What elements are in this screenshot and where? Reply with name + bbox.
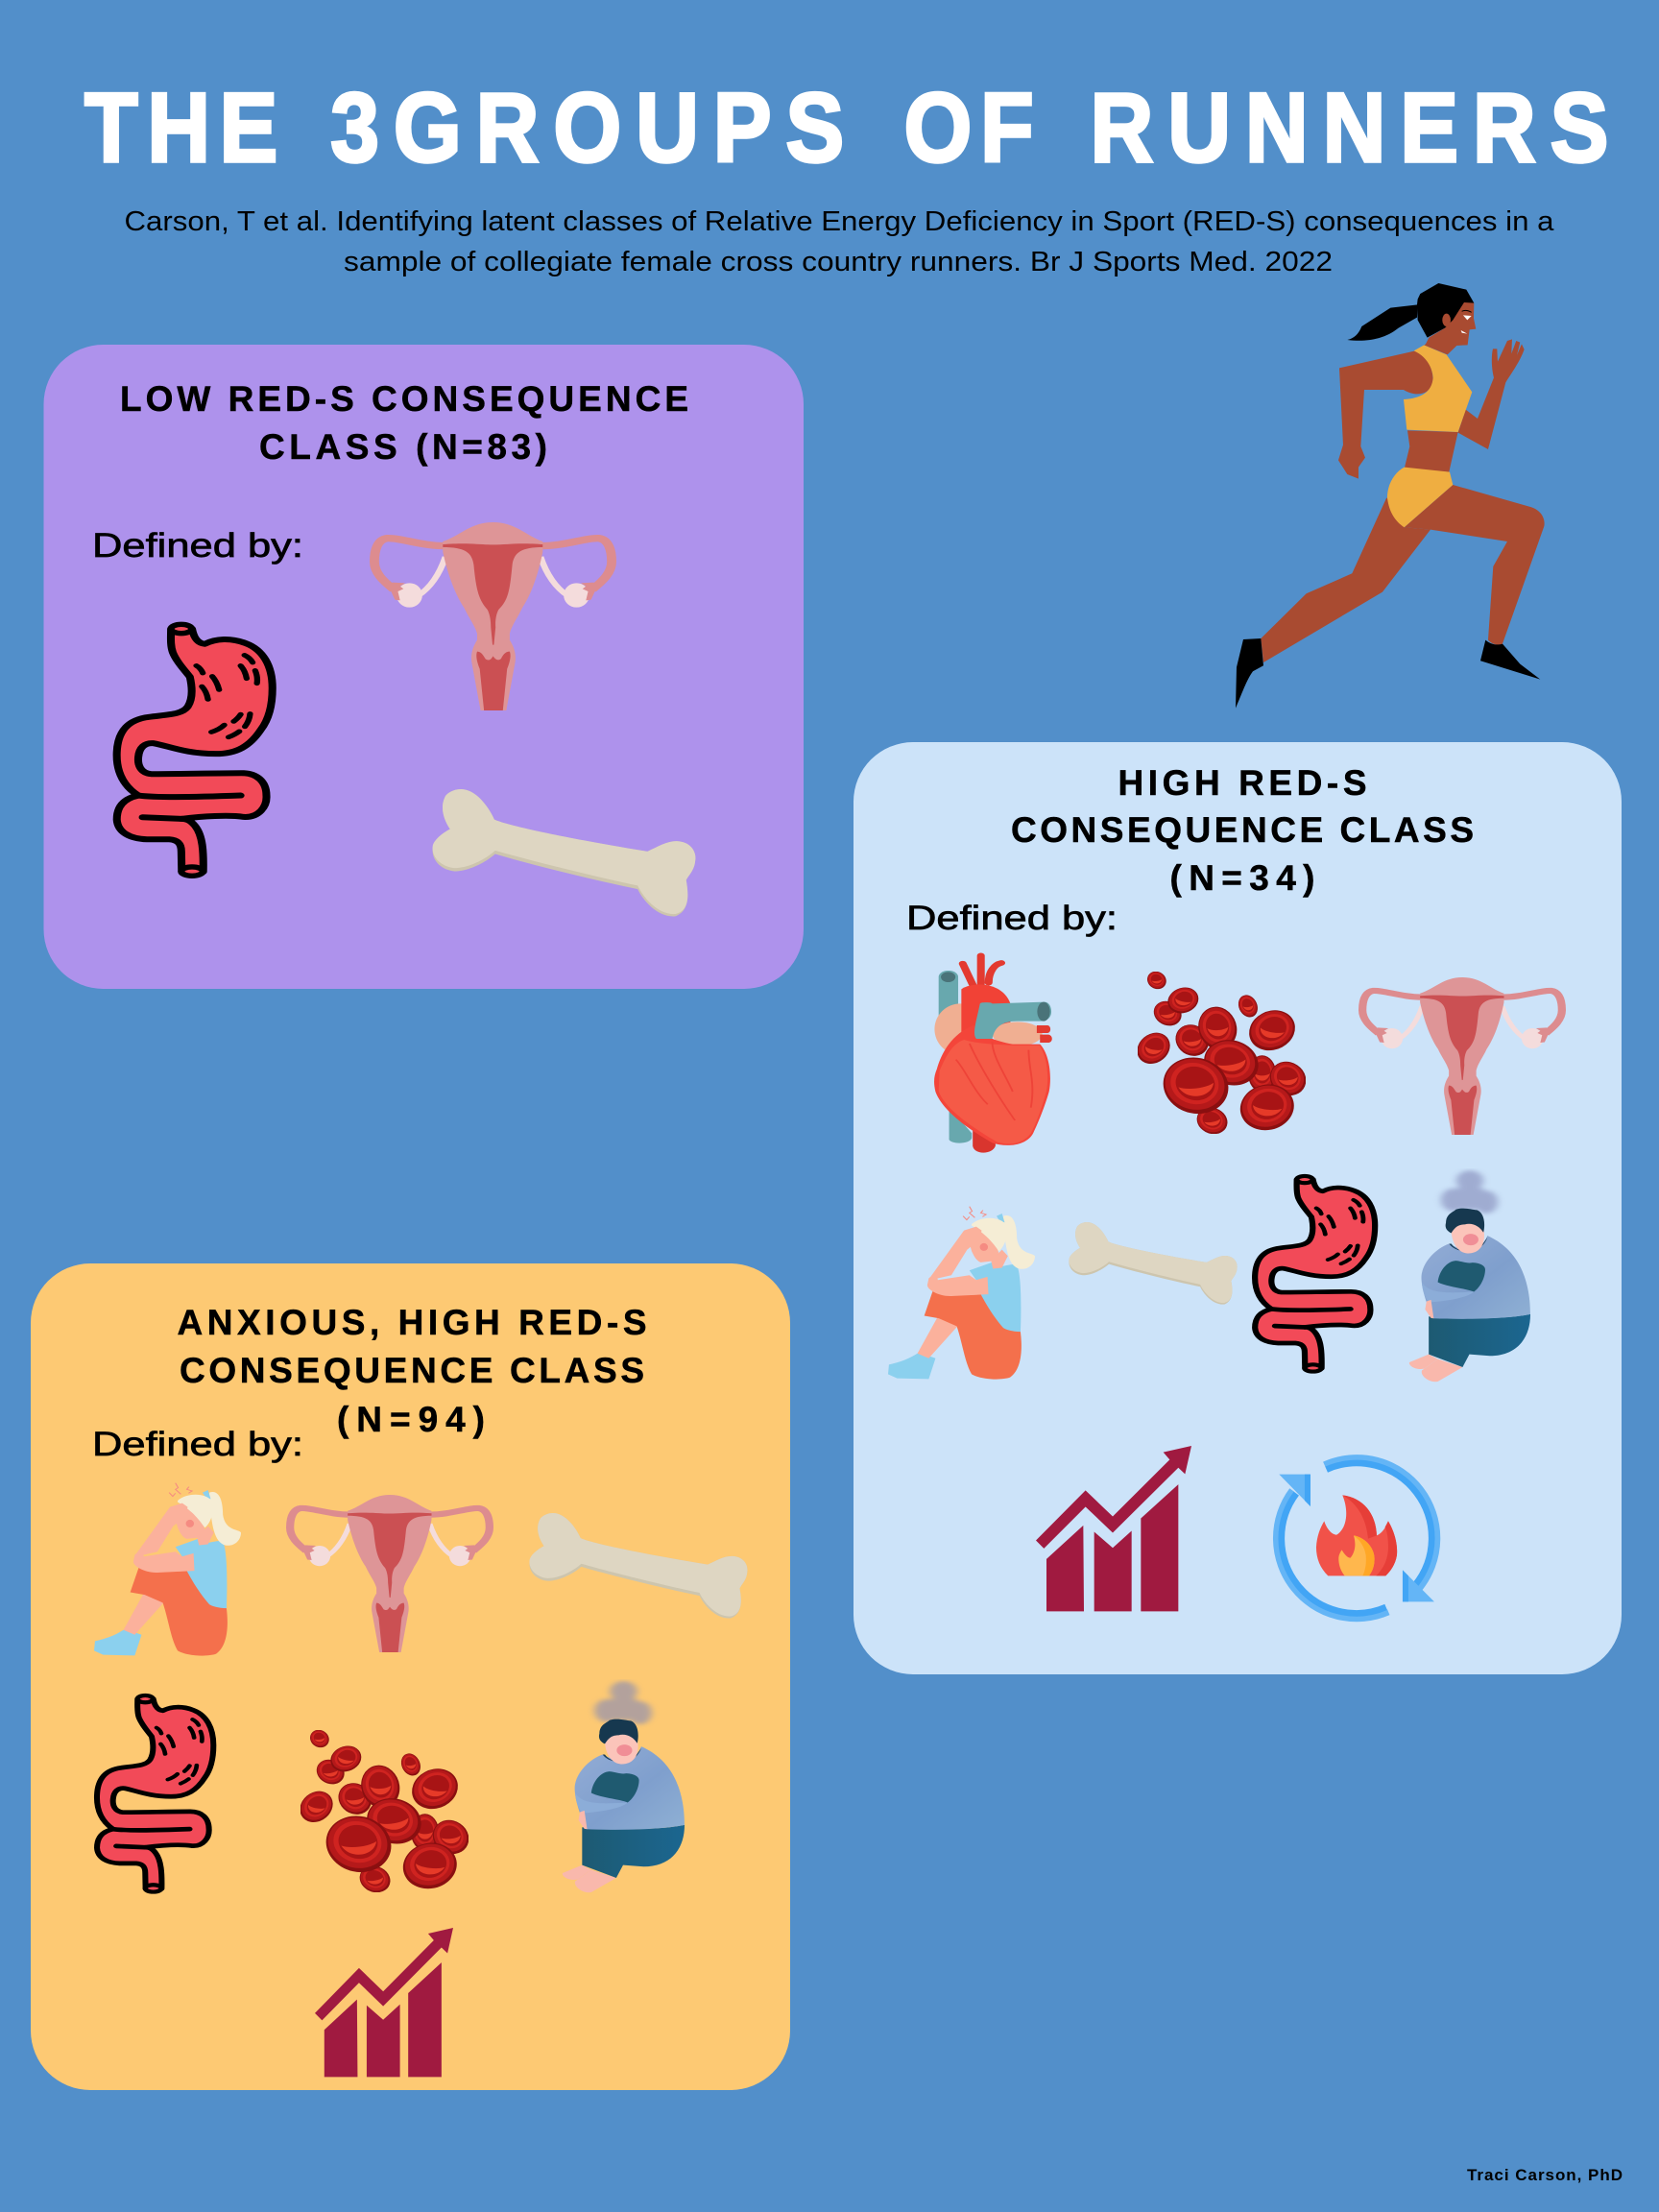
title: 3GROUPS	[330, 74, 858, 182]
title: RUNNERS	[1091, 74, 1623, 182]
heading: high class	[1011, 763, 1474, 898]
heading: low class	[120, 379, 688, 467]
defined by label: Defined by:	[92, 1426, 303, 1463]
icon: rising chart	[315, 1928, 453, 2077]
icon: reproductive system	[374, 522, 612, 710]
icon: reproductive system	[290, 1495, 490, 1652]
heading: high class: CONSEQUENCE CLASS	[1011, 810, 1474, 850]
icon: stomach and intestine	[1255, 1176, 1375, 1372]
icon: woman with headache	[888, 1207, 1035, 1380]
heading: low class: CLASS (N=83)	[259, 427, 547, 467]
icon: bone	[529, 1513, 747, 1619]
heading: anxious class	[177, 1303, 647, 1439]
icon: red blood cells	[296, 1729, 472, 1895]
icon: rising chart	[1036, 1446, 1191, 1611]
icon: anxious man	[563, 1681, 685, 1892]
runner illustration	[1236, 283, 1545, 709]
citation text	[125, 206, 1554, 277]
icon: metabolism cycle with flame	[1276, 1457, 1437, 1619]
icon: anxious man	[1409, 1170, 1530, 1382]
icon: bone	[433, 789, 695, 916]
defined by label: Defined by:	[906, 900, 1118, 937]
heading: high class: (N=34)	[1169, 858, 1315, 898]
citation text: Carson, T et al. Identifying latent classes of Relative Energy Deficiency in Sport (RED-S) consequences in a	[125, 206, 1554, 237]
icon: woman with headache	[94, 1483, 241, 1656]
heading: anxious class: (N=94)	[337, 1400, 485, 1439]
panel: low RED-S consequence class	[44, 345, 804, 989]
icon: stomach and intestine	[97, 1695, 213, 1892]
icon: reproductive system	[1362, 977, 1562, 1135]
icon: stomach and intestine	[117, 624, 273, 876]
heading: anxious class: CONSEQUENCE CLASS	[180, 1351, 644, 1390]
panel: high RED-S consequence class	[854, 742, 1622, 1674]
heading: anxious class: ANXIOUS, HIGH RED-S	[177, 1303, 647, 1342]
panel: anxious, high RED-S consequence class	[31, 1263, 790, 2090]
citation text: sample of collegiate female cross country runners. Br J Sports Med. 2022	[344, 247, 1333, 277]
icon: heart	[934, 955, 1052, 1153]
icon: bone	[1069, 1222, 1238, 1305]
title: OF	[904, 74, 1042, 182]
heading: high class: HIGH RED-S	[1118, 763, 1367, 803]
icon: red blood cells	[1133, 971, 1310, 1137]
title: THE	[84, 74, 287, 182]
author credit: Traci Carson, PhD	[1467, 2166, 1623, 2184]
heading: low class: LOW RED-S CONSEQUENCE	[120, 379, 688, 419]
defined by label: Defined by:	[92, 527, 303, 565]
